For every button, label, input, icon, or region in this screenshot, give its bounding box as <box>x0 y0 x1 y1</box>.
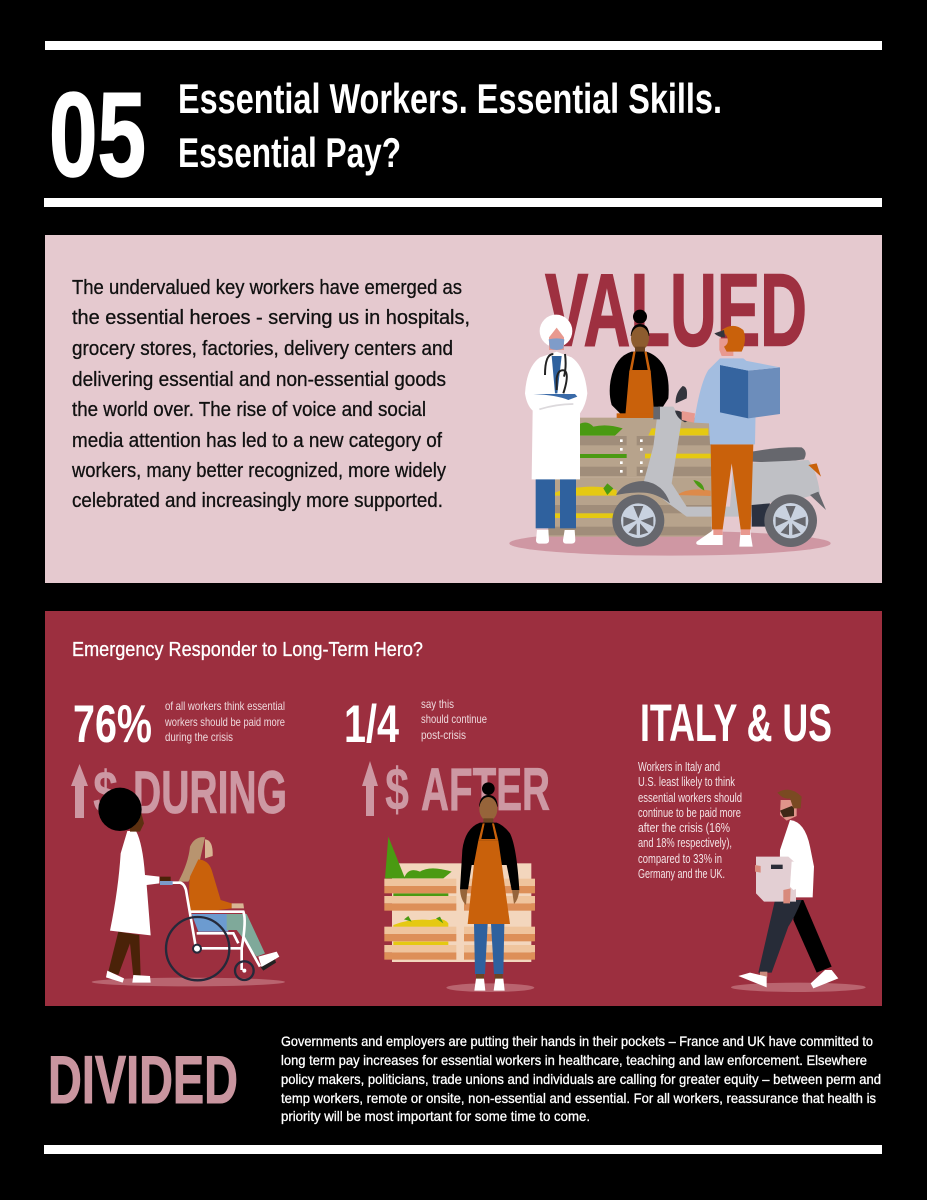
text block: Italy and US: compared to 33% in <box>638 852 722 866</box>
heading: Italy and US: ITALY & US <box>640 694 832 753</box>
stat description: during: workers should be paid more <box>164 715 285 729</box>
heading: divided: DIVIDED <box>48 1042 238 1118</box>
heading: pay up after <box>362 756 550 823</box>
stat description: after <box>421 697 487 742</box>
intro text block: the world over. The rise of voice and social <box>72 399 426 421</box>
title: Essential Pay? <box>178 129 401 176</box>
text block: Italy and US: U.S. least likely to think <box>638 775 736 789</box>
title <box>178 75 722 176</box>
closing text block: Governments and employers are putting their hands in their pockets – France and UK have committed to <box>281 1033 873 1049</box>
illustration: grocer <box>610 310 669 418</box>
text block: Italy and US: Germany and the UK. <box>638 867 725 881</box>
intro text block: celebrated and increasingly more supported. <box>72 490 443 512</box>
illustration: grocer with crates <box>384 782 535 992</box>
illustration: produce crates <box>548 418 712 537</box>
section number: 05 <box>49 68 146 202</box>
text block: Italy and US: continue to be paid more <box>638 806 741 820</box>
heading: pay up during <box>71 759 287 826</box>
panel heading: Emergency Responder to Long-Term Hero? <box>72 639 423 661</box>
intro text block: the essential heroes - serving us in hospitals, <box>72 307 470 329</box>
panel: valued <box>45 235 882 583</box>
intro text block: media attention has led to a new category of <box>72 430 442 452</box>
stat description: during <box>164 699 285 744</box>
text block: Italy and US: Workers in Italy and <box>638 760 720 774</box>
illustration: carer pushing wheelchair <box>92 788 285 986</box>
heading: pay up after: AFTER <box>421 756 550 823</box>
heading: pay up after: $ <box>385 756 409 823</box>
intro text block: grocery stores, factories, delivery centers and <box>72 338 453 360</box>
title: Essential Workers. Essential Skills. <box>178 75 722 122</box>
heading: pay up during: DURING <box>133 759 287 826</box>
illustration: crates <box>384 837 535 962</box>
intro text block: workers, many better recognized, more widely <box>71 460 446 482</box>
stat description: during: during the crisis <box>165 730 233 744</box>
intro text block: The undervalued key workers have emerged as <box>72 277 462 299</box>
stat description: during: of all workers think essential <box>165 699 285 713</box>
closing text block: temp workers, remote or onsite, non-essential and essential. For all workers, reassurance that health is <box>281 1090 876 1106</box>
closing text block: priority will be most important for some time to come. <box>281 1108 590 1124</box>
text block: Italy and US: essential workers should <box>638 791 742 805</box>
intro text block: delivering essential and non-essential goods <box>72 369 446 391</box>
stat: 1/4: 1/4 <box>344 695 399 754</box>
illustration: doctor <box>525 315 587 544</box>
illustration: scooter <box>612 386 826 547</box>
panel: emergency responder <box>45 611 882 1006</box>
stat: 76%: 76% <box>73 695 152 754</box>
illustration: courier <box>682 326 780 547</box>
text block: Italy and US <box>638 760 742 881</box>
closing text block: long term pay increases for essential workers in healthcare, teaching and law enforcement. Elsewhere <box>281 1052 867 1068</box>
text block: Italy and US: and 18% respectively), <box>638 836 732 850</box>
text block: Italy and US: after the crisis (16% <box>638 821 730 835</box>
illustration: man carrying parcel <box>731 790 866 992</box>
intro text block <box>71 277 470 512</box>
heading: pay up during: $ <box>93 759 118 826</box>
closing text block <box>281 1033 881 1124</box>
closing text block: policy makers, politicians, trade unions and individuals are calling for greater equity – between perm and <box>281 1071 881 1087</box>
stat description: after: say this <box>421 697 454 711</box>
illustration: grocer figure <box>460 782 519 991</box>
stat description: after: should continue <box>421 712 487 726</box>
illustration: doctor, grocer and courier with scooter <box>509 310 831 556</box>
stat description: after: post-crisis <box>421 728 466 742</box>
